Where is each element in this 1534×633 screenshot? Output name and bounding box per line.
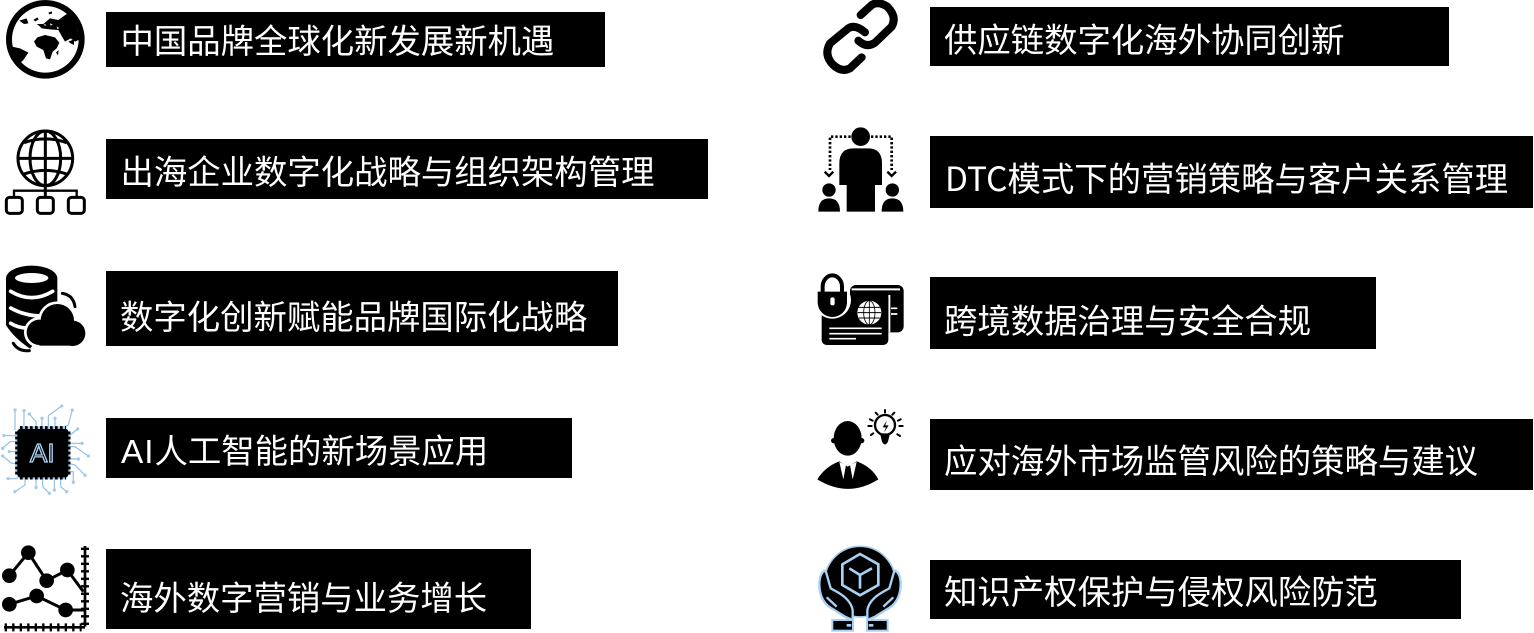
label: 供应链数字化海外协同创新: 供应链数字化海外协同创新: [944, 13, 1345, 62]
icon: businessman with lightbulb: [817, 410, 903, 489]
label: 知识产权保护与侵权风险防范: [930, 560, 1461, 619]
label: 供应链数字化海外协同创新: [930, 7, 1449, 66]
label: 应对海外市场监管风险的策略与建议: 应对海外市场监管风险的策略与建议: [944, 434, 1478, 483]
label: AI人工智能的新场景应用: [106, 418, 572, 478]
label: 应对海外市场监管风险的策略与建议: [930, 419, 1533, 490]
icon: hands holding cube: [819, 546, 901, 631]
icon: earth globe: [6, 0, 85, 79]
icon: database cloud: [6, 266, 85, 351]
label: 跨境数据治理与安全合规: 跨境数据治理与安全合规: [944, 294, 1311, 343]
label: 知识产权保护与侵权风险防范: 知识产权保护与侵权风险防范: [944, 565, 1378, 614]
label: AI人工智能的新场景应用: AI人工智能的新场景应用: [121, 424, 488, 473]
label: DTC模式下的营销策略与客户关系管理: DTC模式下的营销策略与客户关系管理: [945, 152, 1508, 201]
label: 海外数字营销与业务增长: 海外数字营销与业务增长: [120, 571, 487, 620]
label: DTC模式下的营销策略与客户关系管理: [930, 136, 1533, 208]
label: 中国品牌全球化新发展新机遇: 中国品牌全球化新发展新机遇: [120, 14, 554, 63]
label: 数字化创新赋能品牌国际化战略: 数字化创新赋能品牌国际化战略: [120, 290, 587, 339]
icon: network globe: [6, 131, 84, 213]
icon: DTC people: [818, 127, 903, 212]
icon: line chart: [2, 545, 85, 627]
label: 数字化创新赋能品牌国际化战略: [106, 271, 618, 346]
label: 海外数字营销与业务增长: [106, 549, 531, 629]
label: 出海企业数字化战略与组织架构管理: 出海企业数字化战略与组织架构管理: [120, 145, 655, 194]
icon: AI chip: [1, 404, 90, 495]
icon: chain link: [827, 3, 894, 70]
icon: AI chip: AI: [30, 438, 55, 468]
label: 跨境数据治理与安全合规: [930, 277, 1376, 349]
icon: secure card: [814, 275, 904, 345]
